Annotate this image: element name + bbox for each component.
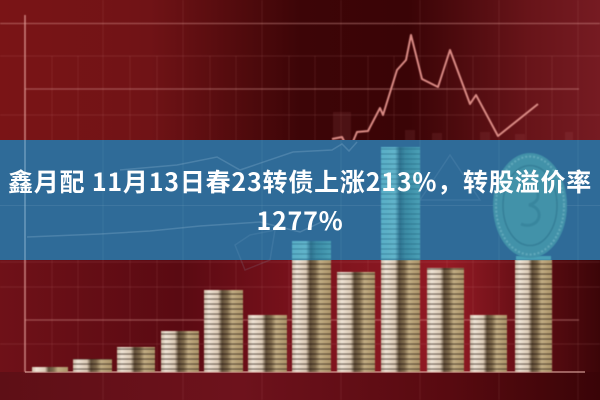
- teal coin stacks seen through band: [292, 147, 551, 260]
- title line 2: 1277%: [256, 202, 344, 238]
- stack 2: [73, 359, 112, 372]
- line chart upper part: [332, 35, 538, 151]
- teal coin: [493, 153, 567, 258]
- faint bars behind chart: [333, 112, 573, 142]
- stack 12: [515, 258, 552, 372]
- stack 11: [470, 315, 507, 372]
- stack 3: [117, 347, 155, 372]
- stack 4: [161, 331, 199, 372]
- blue title band: [0, 140, 600, 270]
- stack 10: [427, 268, 464, 372]
- coin stacks: [32, 258, 552, 372]
- title line 1: 鑫月配 11月13日春23转债上涨213%，转股溢价率: [8, 163, 592, 199]
- stack 5: [204, 290, 243, 372]
- stack 7: [292, 258, 331, 372]
- axis baseline: [25, 371, 585, 373]
- stack 8: [337, 272, 375, 372]
- stack 1: [32, 367, 68, 372]
- stack 6: [248, 315, 287, 372]
- title text: [8, 163, 592, 238]
- stack 9: [381, 258, 420, 372]
